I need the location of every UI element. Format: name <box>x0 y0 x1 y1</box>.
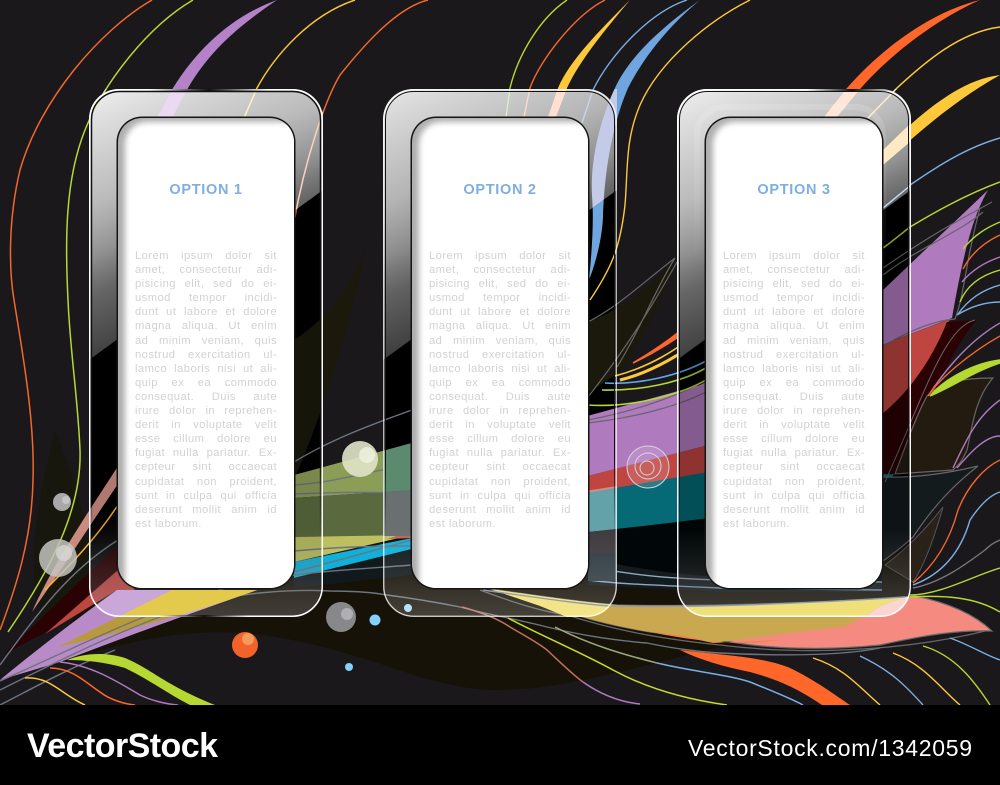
body text: cepteur sint occaecat <box>429 461 571 473</box>
body text: consequat. Duis aute <box>429 391 571 403</box>
body text <box>135 250 277 530</box>
body text: ad minim veniam, quis <box>429 335 571 347</box>
bottom left flowing ribbons <box>25 654 215 705</box>
body text: amet, consectetur adi- <box>135 264 277 276</box>
top left flowing lines <box>0 0 428 632</box>
body text: quip ex ea commodo <box>723 377 865 389</box>
body text: Lorem ipsum dolor sit <box>723 250 865 262</box>
body text: usmod tempor incidi- <box>135 292 277 304</box>
body text: ad minim veniam, quis <box>135 335 277 347</box>
body text: amet, consectetur adi- <box>723 264 865 276</box>
pale olive ribbon <box>294 535 412 562</box>
panel: option 2 <box>383 89 617 617</box>
glass frame and card <box>89 89 323 617</box>
body text: usmod tempor incidi- <box>723 292 865 304</box>
body text: lamco laboris nisi ut ali- <box>429 363 571 375</box>
olive ribbon <box>294 443 412 498</box>
orange edge of gold ribbon <box>650 632 780 643</box>
red ribbon <box>580 319 950 494</box>
dark teal strip <box>588 558 882 592</box>
bubble between panels <box>342 441 378 477</box>
body text: fugiat nulla pariatur. Ex- <box>429 447 571 459</box>
top right ribbons and lines <box>824 0 1000 248</box>
body text: fugiat nulla pariatur. Ex- <box>135 447 277 459</box>
body text: lamco laboris nisi ut ali- <box>135 363 277 375</box>
body text: Lorem ipsum dolor sit <box>429 250 571 262</box>
body text: quip ex ea commodo <box>429 377 571 389</box>
body text: cupidatat non proident, <box>135 476 277 488</box>
body text: irure dolor in reprehen- <box>429 405 571 417</box>
dark leaf shapes <box>34 430 915 690</box>
top centre flowing ribbons <box>506 0 750 300</box>
body text: nostrud exercitation ul- <box>723 349 865 361</box>
body text: quip ex ea commodo <box>135 377 277 389</box>
bubbles lower <box>326 602 412 671</box>
dark red left wedge <box>4 545 118 654</box>
body text: cupidatat non proident, <box>429 476 571 488</box>
body text: dunt ut labore et dolore <box>135 306 277 318</box>
right side middle lines <box>928 323 1000 468</box>
body text: consequat. Duis aute <box>723 391 865 403</box>
panel: option 3 <box>677 89 911 617</box>
glass frame and card <box>383 89 617 617</box>
dark red wedge <box>882 320 977 474</box>
body text: nostrud exercitation ul- <box>135 349 277 361</box>
body text: cepteur sint occaecat <box>135 461 277 473</box>
body text: irure dolor in reprehen- <box>723 405 865 417</box>
body text: usmod tempor incidi- <box>429 292 571 304</box>
left gray strands <box>0 410 882 705</box>
body text: amet, consectetur adi- <box>429 264 571 276</box>
gold ribbon <box>490 589 905 643</box>
bubbles left <box>39 493 77 577</box>
orange bubble <box>232 632 258 658</box>
body text: dunt ut labore et dolore <box>429 306 571 318</box>
body text: pisicing elit, sed do ei- <box>723 278 865 290</box>
teal ribbon <box>580 468 895 533</box>
body text <box>723 250 865 530</box>
red left ribbon <box>45 570 135 634</box>
body text: Lorem ipsum dolor sit <box>135 250 277 262</box>
salmon ribbon <box>490 589 992 648</box>
salmon thin ribbon <box>32 466 118 612</box>
purple ribbon <box>580 190 988 478</box>
body text: fugiat nulla pariatur. Ex- <box>723 447 865 459</box>
bottom centre flowing lines <box>462 607 803 705</box>
body text: dunt ut labore et dolore <box>723 306 865 318</box>
footer band <box>0 705 1000 785</box>
dark strip under cyan <box>294 549 412 588</box>
yellow left ribbon <box>58 590 257 647</box>
heading: OPTION 2 <box>463 182 537 198</box>
bottom right flowing lines <box>813 638 1000 705</box>
body text: magna aliqua. Ut enim <box>429 320 571 332</box>
body text: sunt in culpa qui officia <box>429 490 571 502</box>
body text: derit in voluptate velit <box>135 419 277 431</box>
centre fan of lines <box>588 305 706 405</box>
body text: deserunt mollit anim id <box>135 504 277 516</box>
footer image id: VectorStock.com/1342059 <box>688 735 972 761</box>
body text: derit in voluptate velit <box>723 419 865 431</box>
body text: pisicing elit, sed do ei- <box>429 278 571 290</box>
body text: est laborum. <box>135 518 202 530</box>
glass frame and card <box>677 89 911 617</box>
orange ribbon lower <box>680 650 850 705</box>
body text: deserunt mollit anim id <box>429 504 571 516</box>
dark strands under salmon <box>480 590 985 651</box>
panel: option 1 <box>89 89 323 617</box>
cyan ribbon <box>294 538 412 578</box>
body text: sunt in culpa qui officia <box>723 490 865 502</box>
heading: OPTION 3 <box>757 182 831 198</box>
purple ribbon top left <box>157 0 277 118</box>
body text: esse cillum dolore eu <box>429 433 571 445</box>
body text: magna aliqua. Ut enim <box>723 320 865 332</box>
body text: est laborum. <box>723 518 790 530</box>
body text: est laborum. <box>429 518 496 530</box>
spiral bubble <box>627 446 669 488</box>
body text: nostrud exercitation ul- <box>429 349 571 361</box>
red sliver <box>388 530 412 539</box>
footer logo: VectorStock <box>27 727 218 765</box>
body text: esse cillum dolore eu <box>723 433 865 445</box>
body text: derit in voluptate velit <box>429 419 571 431</box>
body text: deserunt mollit anim id <box>723 504 865 516</box>
dark olive ribbon <box>294 490 412 537</box>
body text: cepteur sint occaecat <box>723 461 865 473</box>
body text: sunt in culpa qui officia <box>135 490 277 502</box>
purple left ribbon <box>0 590 257 680</box>
strand across gold ribbon <box>483 590 905 606</box>
body text: lamco laboris nisi ut ali- <box>723 363 865 375</box>
leaf outlines right <box>880 202 993 582</box>
dark leaves behind cards <box>294 248 676 480</box>
black area under teal ribbon <box>588 500 882 590</box>
body text <box>429 250 571 530</box>
body text: cupidatat non proident, <box>723 476 865 488</box>
centre gray leaf strokes <box>588 258 706 423</box>
body text: esse cillum dolore eu <box>135 433 277 445</box>
body text: pisicing elit, sed do ei- <box>135 278 277 290</box>
body text: irure dolor in reprehen- <box>135 405 277 417</box>
right side lower lines <box>910 460 1000 612</box>
black glass panel backs <box>89 89 911 617</box>
heading: OPTION 1 <box>169 182 243 198</box>
body text: consequat. Duis aute <box>135 391 277 403</box>
right side flowing lines <box>957 222 1000 315</box>
body text: magna aliqua. Ut enim <box>135 320 277 332</box>
body text: ad minim veniam, quis <box>723 335 865 347</box>
